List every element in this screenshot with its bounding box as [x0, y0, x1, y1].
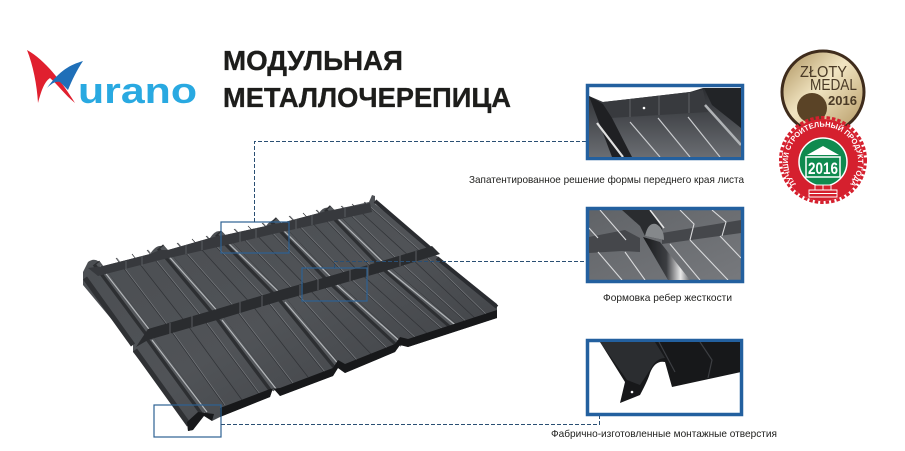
inset 1 frame [588, 86, 742, 158]
title: МОДУЛЬНАЯ [223, 45, 403, 76]
medal globe icon [797, 93, 827, 123]
logo: Murano [27, 50, 197, 111]
medal disc [782, 51, 864, 133]
logo wordmark: urano [78, 70, 197, 111]
step between rows [136, 246, 440, 347]
inset 1 picture [589, 88, 741, 157]
step segment ticks [126, 207, 416, 334]
inset 3 picture [600, 342, 741, 403]
seal year: 2016 [808, 159, 838, 178]
badge: red seal [779, 116, 867, 204]
inset 3 frame [588, 340, 742, 414]
dashed leader line 2 [334, 262, 586, 268]
medal text [800, 64, 857, 108]
title [223, 45, 511, 113]
roof sheet illustration [83, 195, 497, 431]
caption 1: Запатентированное решение формы переднего края листа [469, 174, 744, 186]
medal text: MEDAL [810, 77, 857, 94]
seal scalloped disc [782, 119, 864, 201]
inset 2 frame [588, 208, 742, 282]
badge: gold medal [782, 51, 864, 133]
right edge folds [375, 201, 497, 307]
panel grooves [116, 202, 489, 405]
title: МЕТАЛЛОЧЕРЕПИЦА [223, 82, 511, 113]
inset photo 1: front edge of sheet [588, 86, 742, 158]
dashed leader line 3 [221, 416, 600, 424]
left edge fold [85, 278, 189, 425]
seal year plate [806, 157, 840, 177]
groove highlights [117, 202, 490, 405]
medal text: 2016 [828, 93, 857, 108]
seal roof icon [807, 146, 839, 155]
stiffening ribs [96, 208, 459, 412]
inset photo 3: mounting holes [588, 340, 742, 414]
seal curved text: ЛУЧШИЙ СТРОИТЕЛЬНЫЙ ПРОДУКТ ГОДА [782, 122, 864, 186]
medal text: ZŁOTY [800, 64, 847, 81]
seal green centre [799, 138, 847, 186]
callout box 2 on roof [302, 268, 367, 301]
inset photo 2: stiffening rib [588, 208, 742, 282]
logo icon: red swoosh [27, 50, 75, 103]
dashed leader line 1 [254, 142, 586, 222]
inset 2 picture [589, 210, 741, 280]
caption 3: Фабрично-изготовленные монтажные отверстия [551, 428, 777, 440]
mounting tab corner [187, 412, 214, 431]
roof silhouette [83, 195, 497, 431]
callout box 1 on roof [221, 222, 289, 253]
caption 2: Формовка ребер жесткости [603, 292, 732, 304]
front edge band [220, 310, 497, 417]
logo icon: blue swoosh [47, 61, 83, 90]
top edge band [88, 203, 372, 276]
callout box 3 on roof [154, 405, 221, 437]
seal brick icon [809, 185, 837, 197]
